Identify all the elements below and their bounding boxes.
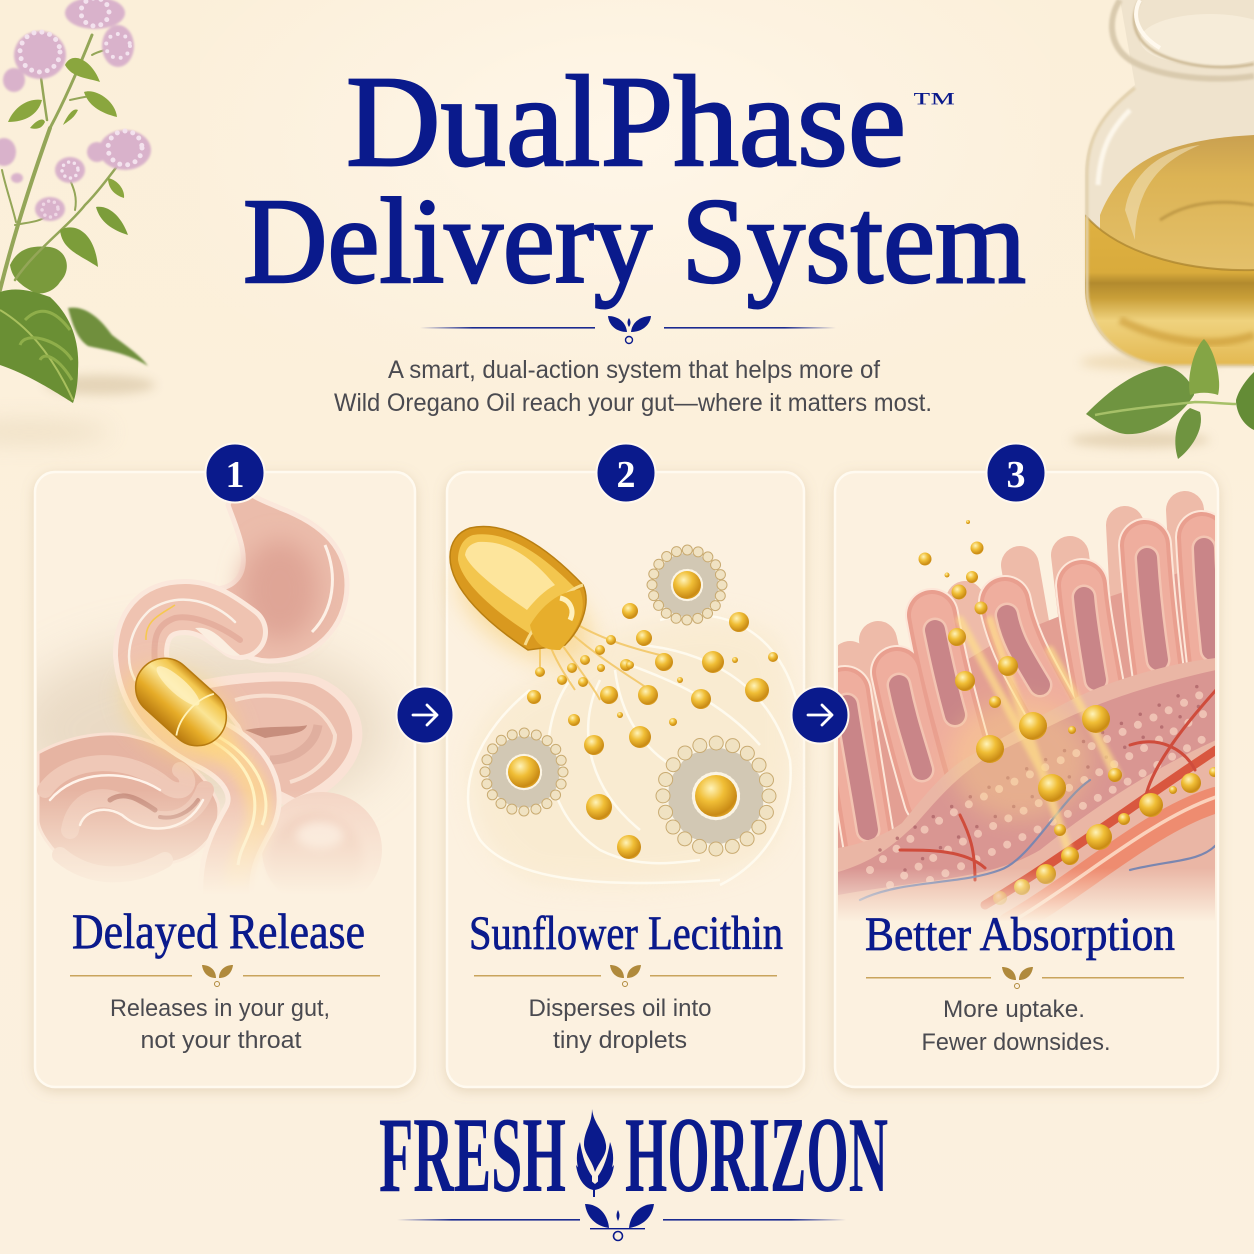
arrow 1 to 2 xyxy=(396,686,454,744)
card 3 description: Fewer downsides. xyxy=(922,1029,1110,1056)
card 2 background xyxy=(447,472,804,1087)
oregano flower clusters xyxy=(0,0,151,221)
panel 3: better absorption xyxy=(835,472,1219,1087)
oil back xyxy=(1100,135,1254,275)
vessels xyxy=(860,690,1216,925)
left intestine coil xyxy=(38,734,219,878)
tissue cell texture xyxy=(870,680,1210,885)
micelle right xyxy=(662,742,770,850)
bottom right ball xyxy=(270,792,382,865)
micelle top xyxy=(651,549,723,621)
panel 2: sunflower lecithin xyxy=(440,472,804,1087)
logo: Fresh Horizon: FRESH xyxy=(379,1096,566,1215)
glow beams xyxy=(960,620,1118,855)
gold droplets xyxy=(527,603,778,859)
swirl wash xyxy=(468,617,794,886)
title: DualPhase xyxy=(346,50,906,194)
card 1 description xyxy=(110,995,330,1054)
title divider with leaf ornament xyxy=(420,316,836,344)
large basil leaf xyxy=(0,290,78,403)
card 3 heading: Better Absorption xyxy=(865,908,1175,961)
card 1 description: not your throat xyxy=(140,1027,302,1054)
logo divider with leaf ornament xyxy=(397,1204,846,1240)
card 1 divider xyxy=(70,965,380,986)
card 2 description: tiny droplets xyxy=(553,1027,687,1054)
card 3 divider xyxy=(866,967,1184,988)
capsule xyxy=(134,658,228,746)
rear leaves xyxy=(10,246,148,366)
card 3 background xyxy=(835,472,1218,1087)
card 1 heading: Delayed Release xyxy=(72,903,365,959)
front villi xyxy=(845,537,1216,850)
card 3 description xyxy=(922,996,1110,1056)
oregano leaves xyxy=(8,58,128,267)
bottom fade xyxy=(838,868,1215,922)
card 2 heading: Sunflower Lecithin xyxy=(469,907,783,960)
number badge 2: 2 xyxy=(616,454,636,496)
subtitle xyxy=(334,356,932,417)
capsule xyxy=(440,527,610,684)
number badge 2 xyxy=(596,444,656,502)
logo: Fresh Horizon: HORIZON xyxy=(625,1096,888,1215)
stems xyxy=(0,35,122,290)
illustration: intestinal villi absorbing droplets xyxy=(838,491,1215,918)
illustration: stomach and intestines with capsule xyxy=(37,495,396,883)
title xyxy=(243,50,1026,309)
number badge 3 xyxy=(986,444,1046,502)
card 2 description xyxy=(528,995,712,1054)
card 2 divider xyxy=(474,965,777,986)
arrow 2 to 3 xyxy=(792,686,848,744)
swirl lines xyxy=(468,615,800,885)
bottom fade xyxy=(40,799,382,895)
icon: leaf xyxy=(576,1109,614,1197)
card 1 background xyxy=(35,472,415,1087)
card 2 description: Disperses oil into xyxy=(528,995,712,1022)
under fill behind villi xyxy=(838,574,1186,848)
number badge 1: 1 xyxy=(226,454,244,496)
micelle left xyxy=(484,732,564,812)
right intestine loop xyxy=(202,672,362,810)
number badge 3: 3 xyxy=(1006,454,1026,496)
illustration: capsule dispersing oil droplets xyxy=(440,527,800,886)
gold droplets xyxy=(918,520,1219,905)
basil leaves, right xyxy=(1086,339,1254,459)
tissue xyxy=(838,658,1216,925)
golden trail xyxy=(146,605,266,890)
spill streaks xyxy=(540,620,660,700)
oil front xyxy=(1085,215,1254,366)
card 1 description: Releases in your gut, xyxy=(110,995,330,1022)
title: ™ xyxy=(912,87,956,119)
stomach xyxy=(220,495,350,664)
title: Delivery System xyxy=(243,174,1026,309)
subtitle: Wild Oregano Oil reach your gut—where it matters most. xyxy=(334,389,932,417)
herb sprigs: oregano and basil, top left xyxy=(0,0,151,403)
oil jar, top right xyxy=(1080,0,1254,370)
number badge 1 xyxy=(206,444,264,502)
small intestine tube xyxy=(129,600,254,910)
back villi xyxy=(850,510,1190,740)
panel 1: delayed release xyxy=(10,472,415,1087)
card 3 description: More uptake. xyxy=(943,996,1085,1023)
subtitle: A smart, dual-action system that helps more of xyxy=(388,356,880,384)
